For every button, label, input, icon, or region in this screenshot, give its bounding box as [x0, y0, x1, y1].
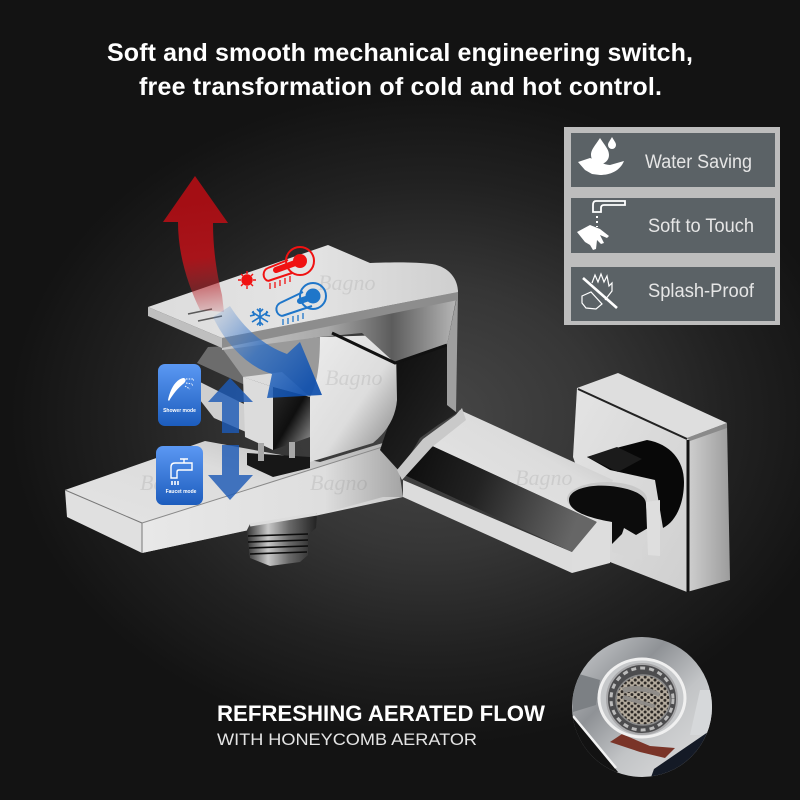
watermarks: Bagno [515, 465, 572, 490]
caption heading: REFRESHING AERATED FLOW [217, 701, 545, 726]
watermarks: Bagno [318, 270, 375, 295]
icon: cold thermometer [276, 283, 326, 325]
body side strip [447, 292, 458, 412]
up arrow [208, 378, 253, 433]
shower holder [567, 482, 660, 560]
wall mount plate [573, 373, 730, 592]
handle stem [243, 372, 310, 477]
row: soft to touch [571, 198, 775, 253]
shower mode tile: Shower mode [163, 408, 196, 414]
icon: sun [238, 271, 256, 289]
faucet illustration [65, 245, 730, 592]
title: Soft and smooth mechanical engineering switch, [107, 39, 693, 67]
row: water saving: Water Saving [645, 152, 752, 173]
row: splash-proof: Splash-Proof [648, 281, 755, 302]
dark lower body [380, 345, 457, 472]
shower mode tile [158, 364, 201, 426]
row: soft to touch: Soft to Touch [648, 216, 754, 237]
down arrow [208, 445, 253, 500]
spout [65, 441, 403, 553]
faucet mode tile [156, 446, 203, 505]
watermarks [140, 270, 572, 495]
red hot-water arrow [163, 176, 228, 312]
under-plate shadow [222, 290, 458, 363]
wall arm [400, 410, 613, 573]
threaded outlet [247, 513, 317, 566]
row: water saving [571, 133, 775, 187]
watermarks: Bagno [140, 470, 197, 495]
blue cold-water arrow [213, 306, 322, 398]
caption subheading: WITH HONEYCOMB AERATOR [217, 730, 477, 749]
watermarks: Bagno [325, 365, 382, 390]
title [107, 39, 693, 101]
row: splash-proof [571, 267, 775, 321]
feature panel [564, 127, 780, 325]
title: free transformation of cold and hot control. [139, 73, 662, 101]
back body [197, 337, 320, 432]
icon: hot thermometer [264, 247, 314, 289]
centre body panel [310, 335, 397, 462]
aerator close-up [565, 635, 715, 780]
icon: snowflake [250, 308, 270, 326]
watermarks: Bagno [310, 470, 367, 495]
diagonal collar [397, 408, 466, 480]
top lever plate [148, 245, 458, 348]
faucet mode tile: Faucet mode [166, 489, 197, 495]
